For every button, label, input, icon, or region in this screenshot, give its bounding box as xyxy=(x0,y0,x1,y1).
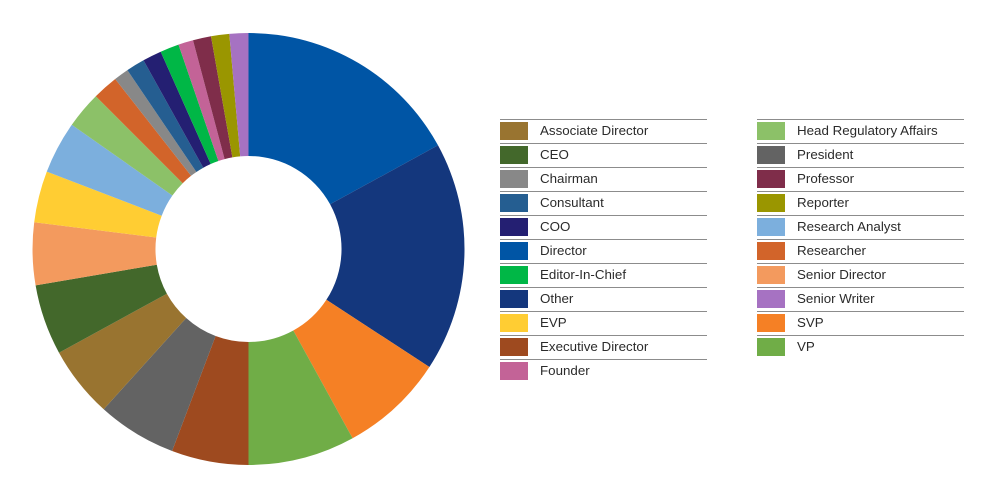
legend item: Senior Writer xyxy=(757,288,964,308)
donut chart xyxy=(33,33,465,465)
slice: Other xyxy=(326,145,465,367)
legend item: Other xyxy=(500,288,707,308)
legend item: President xyxy=(757,144,964,164)
slice: President xyxy=(104,318,216,451)
slice: Senior Writer xyxy=(229,33,248,156)
legend item: EVP xyxy=(500,312,707,332)
legend item: Senior Director xyxy=(757,264,964,284)
legend item: Research Analyst: Research Analyst xyxy=(797,219,901,234)
legend item: Chairman xyxy=(500,168,707,188)
legend item: Consultant xyxy=(500,192,707,212)
slice: Executive Director xyxy=(172,336,248,465)
legend item: Chairman: Chairman xyxy=(540,171,598,186)
legend item: Other: Other xyxy=(540,291,574,306)
legend item: Executive Director xyxy=(500,336,707,356)
legend item: Head Regulatory Affairs xyxy=(757,120,964,140)
slice: Chairman xyxy=(115,70,196,176)
legend item: SVP: SVP xyxy=(797,315,824,330)
legend item: Executive Director: Executive Director xyxy=(540,339,649,354)
legend item: Researcher: Researcher xyxy=(797,243,867,258)
legend item: Director: Director xyxy=(540,243,587,258)
slice: Editor-In-Chief xyxy=(161,45,218,164)
slice: Head Regulatory Affairs xyxy=(72,96,183,196)
legend item: VP: VP xyxy=(797,339,815,354)
legend item: Director xyxy=(500,240,707,260)
legend item: Professor: Professor xyxy=(797,171,855,186)
slice: Reporter xyxy=(211,34,240,157)
legend item: Founder: Founder xyxy=(540,363,590,378)
slice: Associate Director xyxy=(59,294,186,409)
slice: Senior Director xyxy=(33,222,157,285)
legend item: CEO xyxy=(500,144,707,164)
legend item: COO xyxy=(500,216,707,236)
legend item: Head Regulatory Affairs: Head Regulatory Affairs xyxy=(797,123,938,138)
legend item: Reporter xyxy=(757,192,964,212)
legend item: Editor-In-Chief xyxy=(500,264,707,284)
legend item: Researcher xyxy=(757,240,964,260)
legend item: Editor-In-Chief: Editor-In-Chief xyxy=(540,267,626,282)
slice: Director xyxy=(248,33,438,204)
legend item: Senior Director: Senior Director xyxy=(797,267,887,282)
legend item: Professor xyxy=(757,168,964,188)
legend item: CEO: CEO xyxy=(540,147,569,162)
legend item: President: President xyxy=(797,147,854,162)
legend item: Associate Director xyxy=(500,120,707,140)
slice: Founder xyxy=(178,40,225,161)
legend: right column xyxy=(757,120,964,356)
slice: CEO xyxy=(36,265,167,353)
slice: Research Analyst xyxy=(47,125,172,216)
legend item: Senior Writer: Senior Writer xyxy=(797,291,875,306)
slice: Researcher xyxy=(96,79,191,183)
legend item: EVP: EVP xyxy=(540,315,567,330)
slice: EVP xyxy=(34,172,162,238)
slice: COO xyxy=(144,52,211,168)
legend item: VP xyxy=(757,336,964,356)
slice: Professor xyxy=(193,36,232,159)
legend item: Associate Director: Associate Director xyxy=(540,123,649,138)
slice: Consultant xyxy=(127,60,203,172)
legend item: Founder xyxy=(500,360,707,380)
legend: left column xyxy=(500,120,707,380)
slice: VP xyxy=(248,330,353,465)
legend item: Consultant: Consultant xyxy=(540,195,604,210)
legend item: SVP xyxy=(757,312,964,332)
legend item: Research Analyst xyxy=(757,216,964,236)
legend item: COO: COO xyxy=(540,219,570,234)
slice: SVP xyxy=(293,300,429,438)
legend item: Reporter: Reporter xyxy=(797,195,849,210)
